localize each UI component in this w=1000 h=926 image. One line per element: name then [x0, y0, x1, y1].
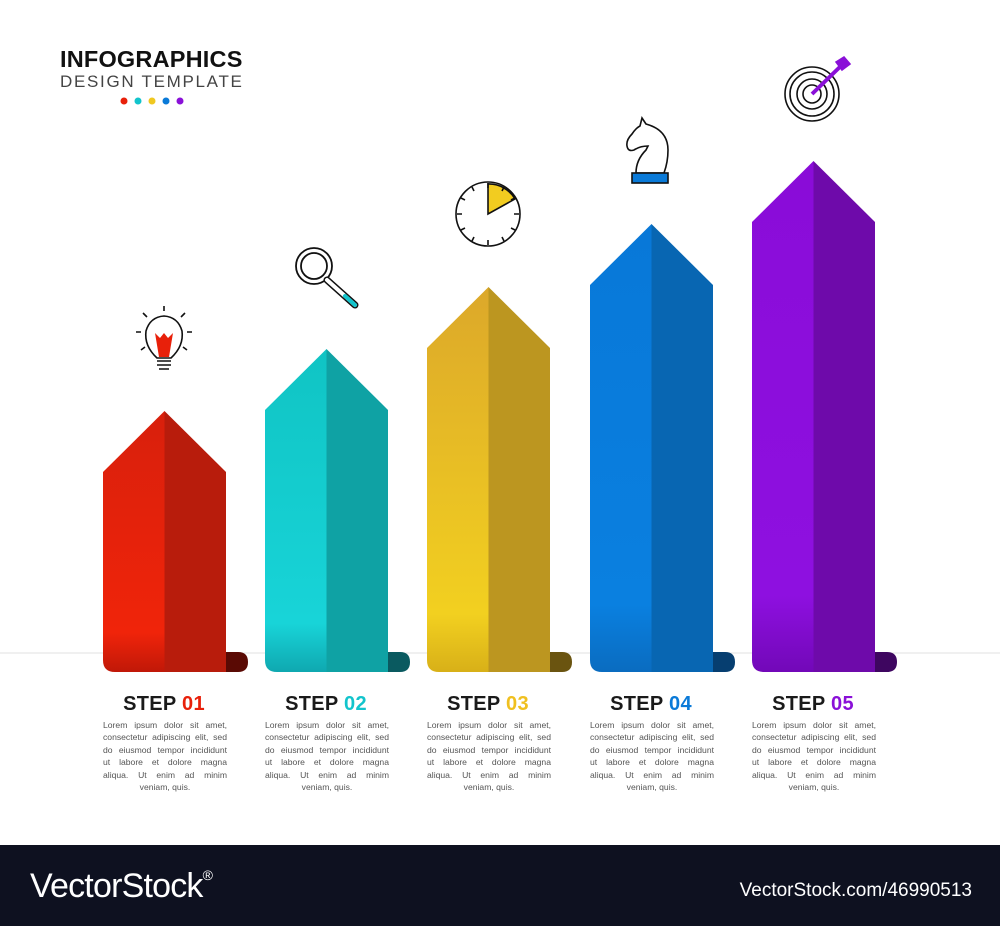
footer bar: VectorStock®: [30, 867, 212, 905]
step 5 text: [752, 720, 876, 792]
footer bar: [0, 845, 1000, 926]
step 2 text: [265, 720, 390, 792]
step 3 text: ut labore et dolore magna: [427, 757, 551, 767]
title: [60, 46, 244, 91]
step 3 text: veniam, quis.: [464, 782, 514, 792]
step 3 text: [427, 720, 552, 792]
step 2 text: consectetur adipiscing elit, sed: [265, 732, 389, 742]
footer bar: VectorStock.com/46990513: [740, 880, 972, 901]
arrow 4: [590, 224, 735, 672]
icon: target: [785, 57, 850, 121]
step 3 text: aliqua. Ut enim ad minim: [427, 770, 551, 780]
step 1 text: ut labore et dolore magna: [103, 757, 227, 767]
step 4 text: [590, 720, 714, 792]
step 3 text: Lorem ipsum dolor sit amet,: [427, 720, 551, 730]
step 5 text: consectetur adipiscing elit, sed: [752, 732, 876, 742]
step 4 label: STEP 04: [610, 693, 692, 715]
step 5 text: Lorem ipsum dolor sit amet,: [752, 720, 876, 730]
step 2 label: STEP 02: [285, 693, 367, 715]
step 1 text: [103, 720, 228, 792]
step 1 text: do eiusmod tempor incididunt: [103, 745, 227, 755]
color dots: [120, 98, 184, 104]
title: DESIGN TEMPLATE: [60, 72, 244, 91]
step 1 text: aliqua. Ut enim ad minim: [103, 770, 227, 780]
step 1 text: consectetur adipiscing elit, sed: [103, 732, 227, 742]
step 3 label: STEP 03: [447, 693, 529, 715]
title: INFOGRAPHICS: [60, 46, 243, 72]
step 1 text: Lorem ipsum dolor sit amet,: [103, 720, 227, 730]
step 4 text: ut labore et dolore magna: [590, 757, 714, 767]
step 2 text: aliqua. Ut enim ad minim: [265, 770, 389, 780]
step 4 text: do eiusmod tempor incididunt: [590, 745, 714, 755]
step 4 text: consectetur adipiscing elit, sed: [590, 732, 714, 742]
chart: arrows and icons: [0, 56, 1000, 672]
arrow 5: [752, 161, 897, 672]
step 4 text: Lorem ipsum dolor sit amet,: [590, 720, 714, 730]
arrow 2: [265, 349, 410, 672]
step 2 text: veniam, quis.: [302, 782, 352, 792]
step 3 text: do eiusmod tempor incididunt: [427, 745, 551, 755]
step 5 text: aliqua. Ut enim ad minim: [752, 770, 876, 780]
step 4 text: aliqua. Ut enim ad minim: [590, 770, 714, 780]
icon: clock: [456, 182, 520, 246]
step 5 text: veniam, quis.: [789, 782, 839, 792]
step 2 text: do eiusmod tempor incididunt: [265, 745, 389, 755]
step 1 text: veniam, quis.: [140, 782, 190, 792]
step 4 text: veniam, quis.: [627, 782, 677, 792]
icon: bulb: [136, 306, 192, 369]
step 3 text: consectetur adipiscing elit, sed: [427, 732, 551, 742]
step 2 text: Lorem ipsum dolor sit amet,: [265, 720, 389, 730]
step 5 text: do eiusmod tempor incididunt: [752, 745, 876, 755]
step 5 text: ut labore et dolore magna: [752, 757, 876, 767]
arrow 3: [427, 287, 572, 672]
step 5 label: STEP 05: [772, 693, 854, 715]
icon: magnifier: [296, 248, 355, 305]
icon: chess knight: [627, 118, 668, 183]
step 2 text: ut labore et dolore magna: [265, 757, 389, 767]
step 1 label: STEP 01: [123, 693, 205, 715]
arrow 1: [103, 411, 248, 672]
